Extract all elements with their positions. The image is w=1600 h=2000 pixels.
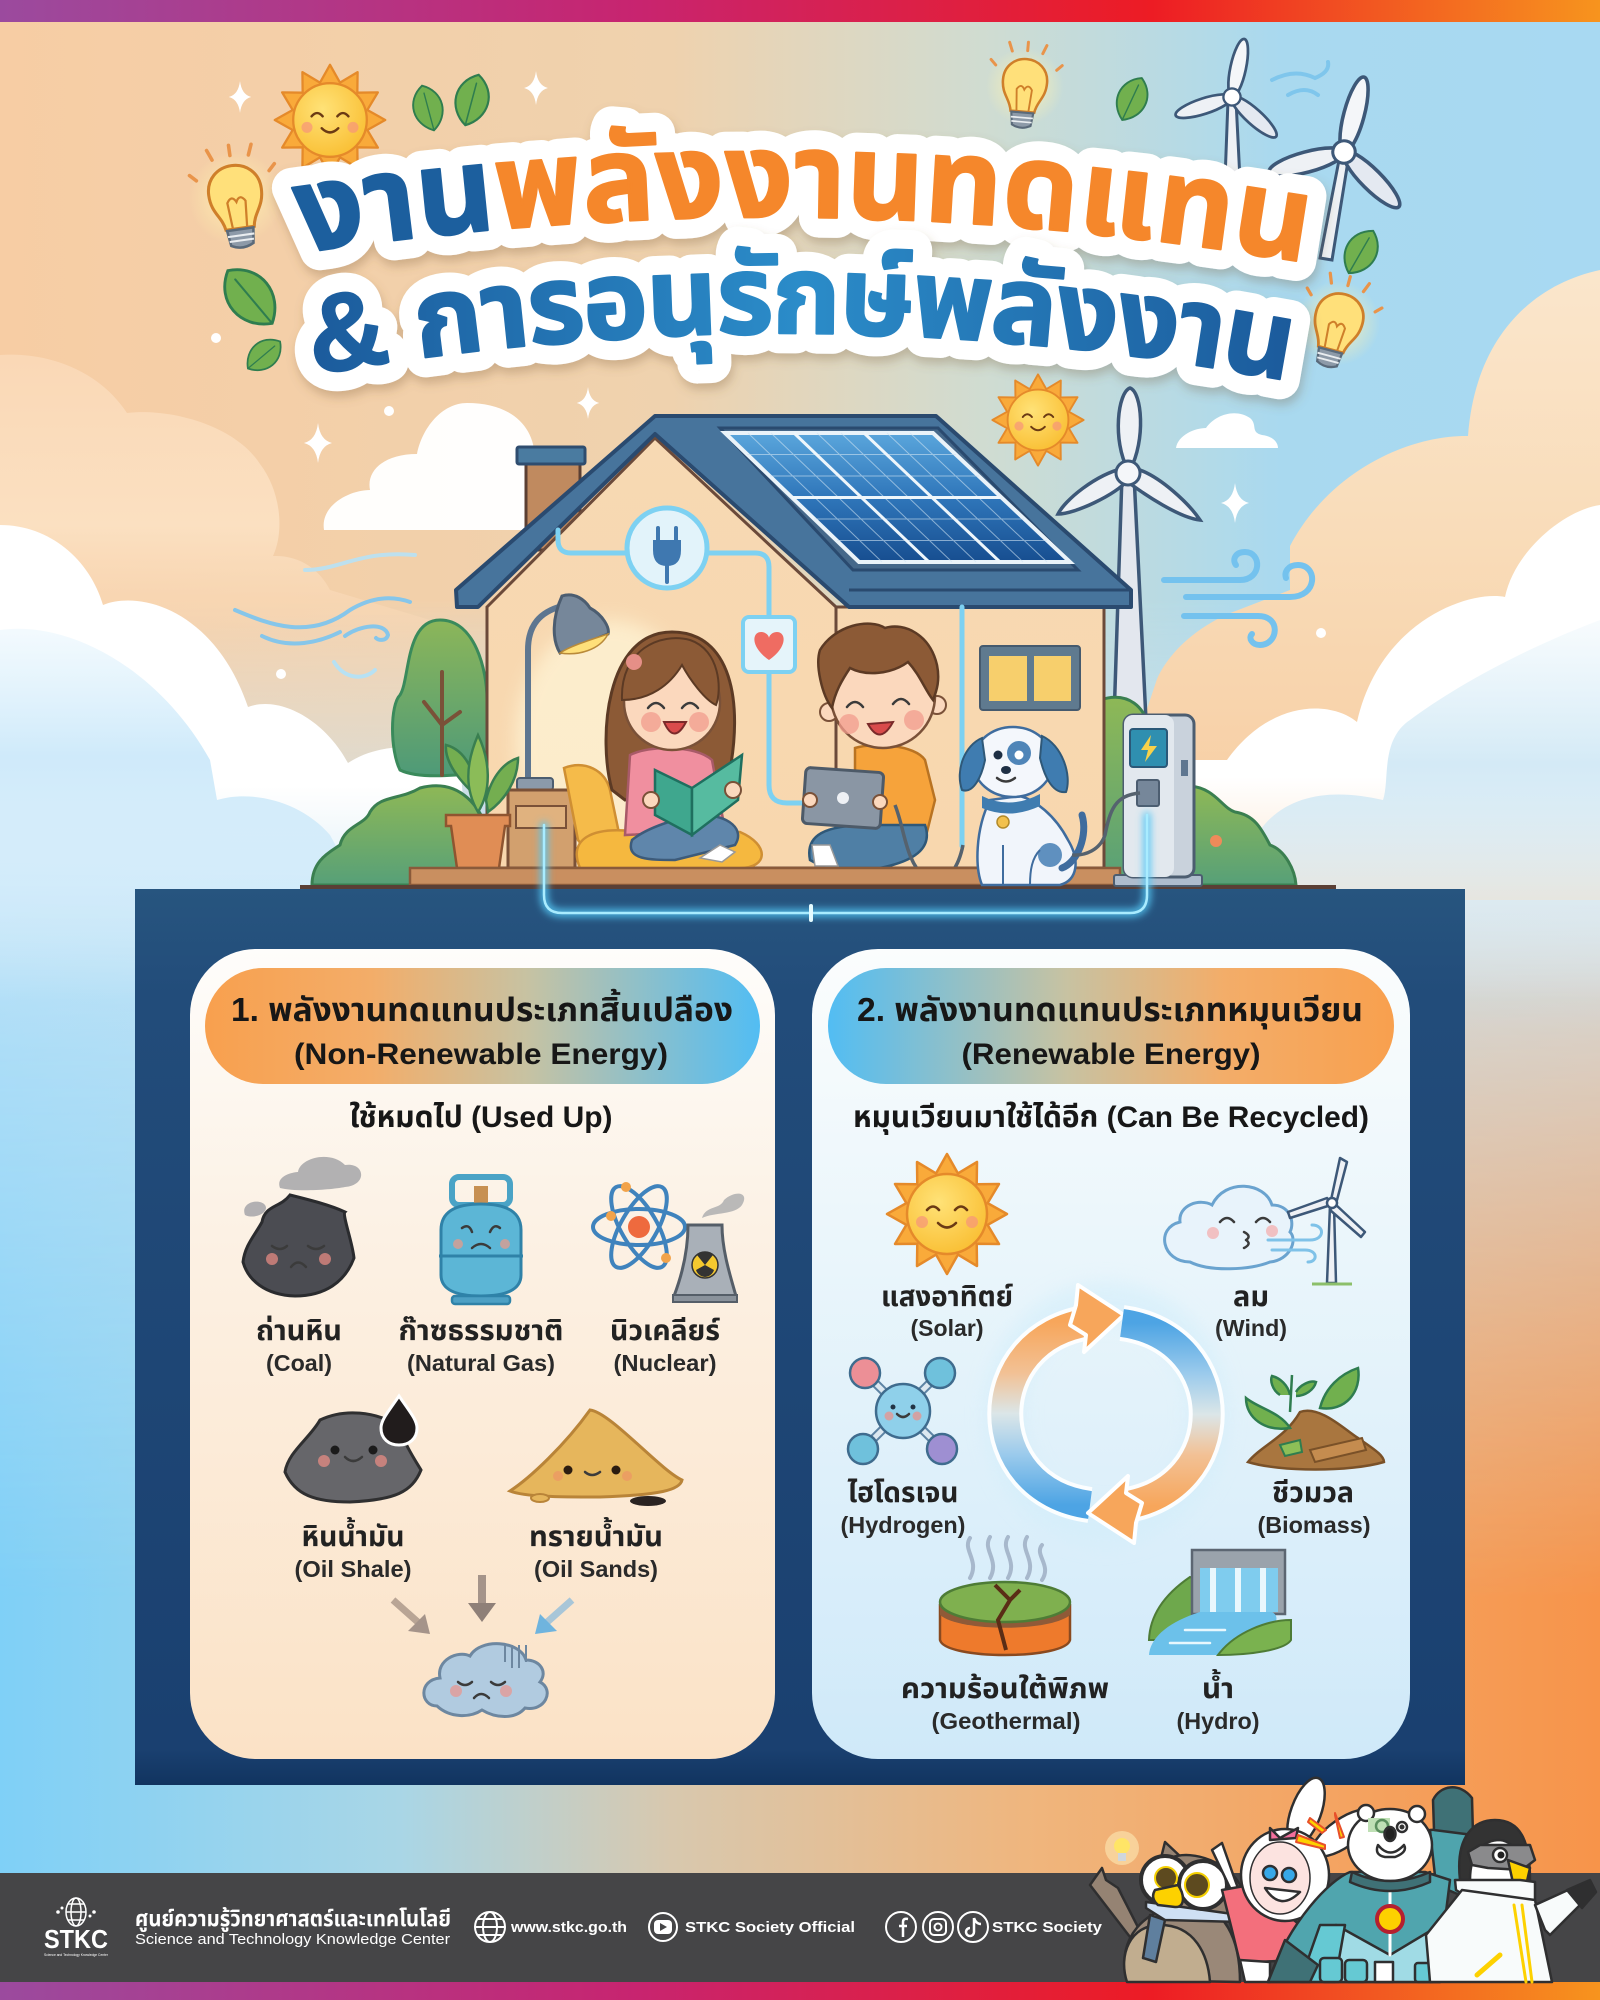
boy [802,624,946,868]
energy wires in house [558,530,962,846]
title line 1: งานพลังงานทดแทน [290,125,1308,262]
heading pill: (Non-Renewable Energy) [294,1038,668,1071]
icon: nuclear [593,1178,744,1302]
icon: geothermal [940,1537,1070,1655]
robot dog [960,727,1084,885]
wind lines right [1164,552,1312,645]
icon: hydro dam [1149,1550,1291,1655]
arrow: right [535,1600,572,1634]
social handle: STKC Society [992,1919,1103,1936]
wind turbine [1058,388,1200,720]
girl [606,632,742,862]
label: oil shale [294,1516,412,1582]
mascots [1090,1773,1596,1982]
label: biomass: (Biomass) [1258,1512,1370,1538]
icon: oil sands [510,1410,682,1506]
icon: sad cloud [424,1644,547,1716]
label: natural gas: (Natural Gas) [407,1350,555,1376]
logo: STKC: Science and Technology Knowledge Center [44,1952,109,1957]
icon: recycle cycle arrows [1004,1285,1208,1543]
label: oil shale: (Oil Shale) [294,1556,412,1582]
label: nuclear: นิวเคลียร์ [610,1315,720,1346]
deck [300,868,1336,889]
solar panel [720,428,1078,570]
EV charger [1072,715,1202,886]
icon: globe [475,1912,505,1942]
label: coal [256,1315,342,1376]
label: oil shale: หินน้ำมัน [302,1516,404,1552]
label: wind [1215,1281,1287,1341]
label: solar [881,1281,1013,1341]
mascot: bunny girl [1212,1773,1381,1982]
icon: lightbulb top [982,39,1067,131]
tree and bushes [312,620,1296,885]
house walls [487,438,1104,868]
logo: STKC [44,1898,109,1957]
icon: heart box [743,617,795,672]
label: solar: (Solar) [910,1315,984,1341]
mascot: lightbulb [1105,1831,1139,1865]
panel: non-renewable energy [190,949,775,1759]
icon: coal [243,1157,361,1296]
label: coal: (Coal) [266,1350,332,1376]
label: solar: แสงอาทิตย์ [881,1281,1013,1312]
mascot: polar bear [1268,1787,1478,1982]
icon: solar [887,1154,1007,1274]
subheading: ใช้หมดไป (Used Up) [350,1101,612,1134]
icon: instagram [923,1912,953,1942]
label: biomass: ชีวมวล [1272,1477,1354,1508]
footer organisation name [135,1906,451,1948]
label: natural gas [398,1315,564,1376]
glowing ground wire [544,815,1147,920]
heading pill: (Renewable Energy) [962,1038,1260,1071]
background clouds [0,270,1600,1050]
panel: renewable energy [812,949,1410,1759]
device cable [895,805,963,881]
floor lamp [517,595,608,790]
footer organisation name: Science and Technology Knowledge Center [135,1931,450,1948]
label: nuclear: (Nuclear) [614,1350,716,1376]
logo: STKC: STKC [44,1924,108,1954]
footer organisation name: ศูนย์ความรู้วิทยาศาสตร์และเทคโนโลยี [135,1906,451,1932]
footer band [0,1873,1600,1982]
label: hydrogen: ไฮโดรเจน [848,1477,958,1508]
icon: lightbulb right [1285,266,1391,377]
label: hydrogen [840,1477,966,1538]
mascot: penguin [1426,1820,1596,1982]
icon: leaves [211,71,1386,379]
arrow: centre [468,1575,496,1622]
icon: facebook [886,1912,916,1942]
label: biomass [1258,1477,1370,1538]
label: wind: (Wind) [1215,1315,1287,1341]
heading pill: 2. พลังงานทดแทนประเภทหมุนเวียน [857,991,1363,1030]
title line 2: & การอนุรักษ์พลังงาน [314,246,1292,380]
arrow: left [393,1600,430,1634]
heading pill: 1. พลังงานทดแทนประเภทสิ้นเปลือง [231,988,733,1028]
icon: wind turbines top right [1170,28,1434,260]
label: oil sands [529,1516,663,1582]
label: wind: ลม [1233,1281,1269,1312]
chimney [517,447,585,550]
wind lines left [235,554,415,677]
house window [980,646,1080,710]
label: oil sands: ทรายน้ำมัน [529,1516,663,1552]
bottom gradient bar [0,1982,1600,2000]
label: oil sands: (Oil Sands) [534,1556,658,1582]
youtube channel: STKC Society Official [685,1919,855,1936]
small white cloud left of house [324,403,535,530]
label: hydro [1176,1668,1260,1734]
top gradient bar [0,0,1600,22]
icon: natural gas tank [439,1177,523,1304]
cushions [564,765,762,868]
label: hydrogen: (Hydrogen) [840,1512,966,1538]
roof [456,416,1131,607]
small white cloud right of house [1176,413,1278,448]
heading pill [205,968,760,1084]
icon: smiling sun top left [275,65,385,175]
label: hydro: น้ำ [1202,1668,1234,1704]
title line 2 outline: & การอนุรักษ์พลังงาน [292,229,1316,410]
label: geothermal: ความร้อนใต้พิภพ [901,1673,1109,1704]
subheading: หมุนเวียนมาใช้ได้อีก (Can Be Recycled) [853,1101,1369,1135]
icon: biomass [1246,1368,1384,1470]
label: geothermal [901,1673,1109,1734]
label: nuclear [610,1315,720,1376]
icon: wind cloud and turbine [1165,1158,1365,1284]
side table [508,790,575,868]
title line 1 outline: งานพลังงานทดแทน [270,106,1334,292]
house [456,416,1131,868]
title [270,106,1334,410]
label: geothermal: (Geothermal) [932,1708,1080,1734]
label: hydro: (Hydro) [1176,1708,1260,1734]
icon: hydrogen molecule [848,1358,957,1464]
website: www.stkc.go.th [510,1919,627,1936]
navy panel [135,815,1465,1785]
mascot: owl [1090,1842,1240,1982]
heading pill [828,968,1394,1084]
icon: sun above house [992,374,1084,466]
icon: tiktok [958,1912,988,1942]
label: natural gas: ก๊าซธรรมชาติ [398,1315,564,1346]
icon: lightbulb left [182,139,289,254]
icon: plug circle [627,508,707,588]
potted plant [446,735,518,868]
icon: oil shale [285,1396,421,1502]
icon: youtube [649,1913,677,1941]
label: coal: ถ่านหิน [256,1315,342,1346]
decorative sparkles and dots [211,71,1326,679]
